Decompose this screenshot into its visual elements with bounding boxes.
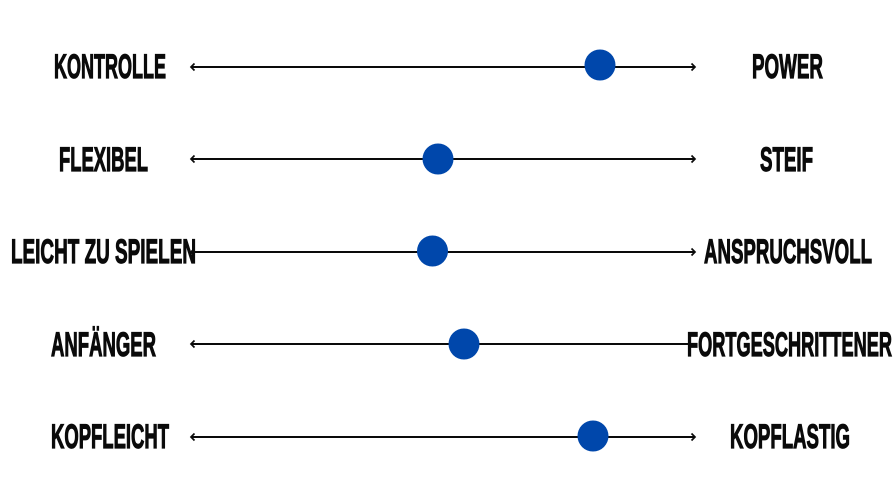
- label: Leicht zu spielen: LEICHT ZU SPIELEN: [11, 233, 196, 271]
- scale row: Kontrolle to Power: [54, 48, 823, 86]
- double arrow: [191, 156, 695, 162]
- slider marker: [417, 236, 448, 266]
- double arrow: [191, 248, 695, 256]
- double arrow: [191, 340, 695, 348]
- slider marker: [584, 50, 616, 80]
- slider marker: [448, 328, 480, 360]
- slider marker: [578, 420, 608, 452]
- label: Kontrolle: KONTROLLE: [54, 48, 166, 86]
- label: Kopfleicht: KOPFLEICHT: [51, 418, 169, 456]
- double arrow: [191, 64, 695, 70]
- scale row: Flexibel to Steif: [59, 141, 813, 179]
- scale row: Kopfleicht to Kopflastig: [51, 418, 850, 456]
- double arrow: [191, 434, 695, 440]
- scale row: Anfänger to Fortgeschrittener: [51, 326, 892, 364]
- slider marker: [422, 144, 454, 174]
- label: Power: POWER: [752, 48, 823, 86]
- scale row: Leicht zu spielen to Anspruchsvoll: [11, 233, 872, 271]
- label: Flexibel: FLEXIBEL: [59, 141, 148, 179]
- label: Anfänger: ANFÄNGER: [51, 326, 156, 364]
- label: Steif: STEIF: [760, 141, 813, 179]
